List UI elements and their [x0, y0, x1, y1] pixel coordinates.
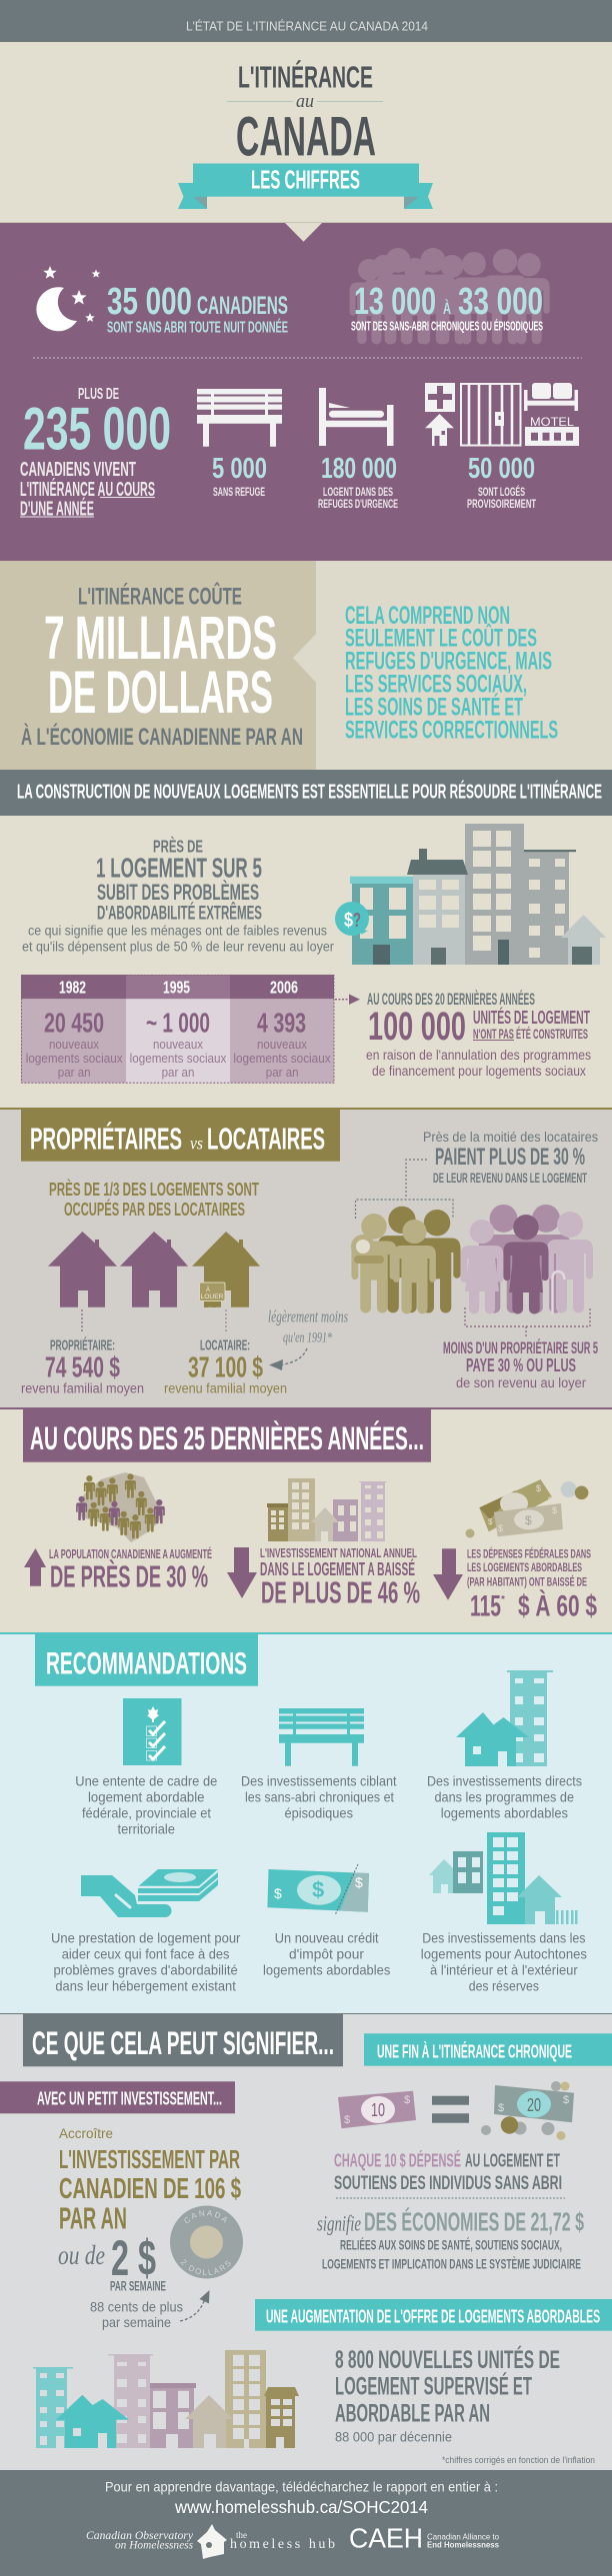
stat: 50 000: 50 000 [468, 453, 535, 485]
banner: end of chronic homelessness [364, 2033, 612, 2066]
icon: toonie coin: 2 DOLLARS [180, 2259, 231, 2275]
stat: 50 000: SONT LOGÉS [478, 484, 525, 499]
text: every 10 dollars: CHAQUE 10 $ DÉPENSÉ [334, 2149, 461, 2170]
title: canada: CANADA [236, 105, 376, 168]
logo: canadian observatory: on Homelessness [115, 2539, 194, 2551]
text: 88 cents [90, 2299, 183, 2330]
text: 8 800 new units [335, 2345, 560, 2445]
text: 8 800 new units: 88 000 par décennie [335, 2429, 452, 2445]
text: direct investments [427, 1773, 582, 1821]
icon: money: $ [488, 1517, 493, 1526]
text: 88 cents: par semaine [102, 2314, 171, 2330]
text: targeted investments: les sans-abri chroniques et [245, 1789, 394, 1805]
icon: rental house with sign: À [206, 1287, 210, 1293]
title panel [0, 42, 612, 223]
heading [23, 2013, 343, 2066]
icon: equals [432, 2096, 469, 2123]
text: indigenous housing: logements pour Autochtones [421, 1945, 587, 1961]
illustration: buildings [335, 824, 606, 965]
arrow: down [227, 1547, 257, 1598]
text: indigenous housing: à l'intérieur et à l'extérieur [430, 1961, 578, 1977]
icon: money: $ [525, 1513, 532, 1527]
stat: 13 000 à 33 000: À [443, 299, 451, 318]
top header bar [0, 0, 612, 42]
icon: jail [461, 384, 520, 446]
stat: national investment: DANS LE LOGEMENT A BAISSÉ [260, 1558, 415, 1579]
column: 2006: logements sociaux [233, 1052, 331, 1066]
text: housing benefit: dans leur hébergement existant [55, 1977, 236, 1993]
stat: 35 000 [107, 281, 288, 337]
logo: homeless hub [197, 2524, 335, 2559]
arrow: dashed note arrow [269, 1348, 307, 1370]
icon: renter family [351, 1207, 460, 1313]
stat: national investment [260, 1546, 420, 1610]
text: targeted investments: épisodiques [284, 1805, 353, 1821]
column: 1982: par an [58, 1066, 91, 1080]
renter income: 37 100 $ [188, 1352, 263, 1384]
column: 1995: par an [162, 1066, 194, 1080]
illustration: city block [33, 2350, 299, 2448]
stat: 5 000 sans refuge: 5 000 [212, 453, 267, 485]
heading [23, 1409, 431, 1462]
stat: 235 000: L'ITINÉRANCE AU COURS [20, 478, 155, 501]
text: housing benefit: aider ceux qui font face à des [62, 1945, 230, 1961]
one third text: OCCUPÉS PAR DES LOCATAIRES [64, 1199, 245, 1220]
heading: LOCATAIRES [207, 1121, 325, 1156]
one third text [49, 1179, 259, 1220]
stat: 13 000 à 33 000: 33 000 [458, 281, 543, 323]
column: 1982: 1982 [59, 977, 86, 997]
logo: caeh: End Homelessness [427, 2540, 500, 2549]
stat: population: LA POPULATION CANADIENNE A AUGMENTÉ [49, 1546, 212, 1561]
text: direct investments: logements abordables [441, 1805, 568, 1821]
column: 2006: 4 393 [257, 1008, 306, 1039]
icon: framework document [123, 1698, 182, 1765]
one third text: PRÈS DE 1/3 DES LOGEMENTS SONT [49, 1179, 259, 1200]
1 in 5 text [22, 836, 334, 955]
icon: speech bubble [335, 902, 369, 936]
icon: money: $ [536, 1483, 541, 1493]
text: learn more: Pour en apprendre davantage, télédécharchez le rapport en entier à : [105, 2478, 498, 2494]
text: investment per canadian: 2 $ [111, 2230, 156, 2286]
stat: 180 000: LOGENT DANS DES [323, 485, 393, 499]
renters text: Près de la moitié des locataires [423, 1130, 598, 1145]
column: 1982: logements sociaux [26, 1052, 123, 1066]
icon: motel bed [524, 383, 578, 411]
heading: vs [190, 1133, 203, 1153]
text: targeted investments: Des investissements ciblant [241, 1773, 397, 1789]
owner income: revenu familial moyen [21, 1380, 144, 1395]
stat: 35 000: 35 000 [107, 281, 192, 323]
stat: 180 000: REFUGES D'URGENCE [318, 497, 398, 511]
title: au with rules: au [296, 91, 314, 112]
column: 1995: 1995 [163, 977, 190, 997]
1 in 5 text: SUBIT DES PROBLÈMES [97, 880, 259, 905]
icon: crowd [350, 248, 550, 344]
footnote: *chiffres corrigés en fonction de l'inflation [442, 2455, 595, 2466]
note: slightly less than 1991: qu'en 1991* [283, 1330, 332, 1346]
icon: 10 dollar bill [338, 2091, 416, 2128]
icon: bed [319, 388, 394, 446]
stat: 180 000: 180 000 [321, 453, 397, 485]
heading [21, 1110, 340, 1162]
100 000 units text [366, 990, 591, 1079]
column: 1982: nouveaux [49, 1038, 100, 1052]
icon: money: $ [548, 1495, 553, 1505]
text: direct investments: dans les programmes de [434, 1789, 574, 1805]
stat: 35 000: CANADIENS [197, 292, 288, 320]
renter income [164, 1337, 287, 1395]
ribbon: les chiffres [178, 164, 433, 209]
stat: 5 000 sans refuge: SANS REFUGE [213, 485, 265, 499]
stat: 13 000 à 33 000: 13 000 [354, 281, 436, 323]
text: savings: signifie [317, 2211, 361, 2236]
stat: 235 000: CANADIENS VIVENT [20, 459, 136, 481]
stat: population [49, 1546, 212, 1594]
ribbon: les chiffres: LES CHIFFRES [251, 165, 360, 195]
text: 8 800 new units: ABORDABLE PAR AN [335, 2400, 490, 2428]
arrow: table to units [335, 994, 360, 1005]
stat: national investment: L'INVESTISSEMENT NATIONAL ANNUEL [260, 1546, 417, 1560]
column: 1982 [26, 977, 123, 1080]
renter income: revenu familial moyen [164, 1380, 287, 1395]
stat: federal spending: 115 [470, 1590, 501, 1623]
heading: RECOMMANDATIONS [46, 1644, 247, 1680]
icon: bill with tax credit cut: $ [312, 1877, 324, 1902]
icon: house [425, 414, 454, 446]
text: tax credit: Un nouveau crédit [275, 1929, 379, 1945]
logo: caeh: Canadian Alliance to [427, 2533, 500, 2542]
icon: buildings [267, 1478, 387, 1541]
icon: moon and stars [36, 266, 100, 331]
text: framework [75, 1773, 217, 1837]
text: investment per canadian: L'INVESTISSEMENT PAR [59, 2146, 240, 2174]
renter income: LOCATAIRE: [200, 1337, 250, 1354]
icon: 10 dollar bill: 10 [371, 2100, 385, 2120]
1 in 5 text: et qu'ils dépensent plus de 50 % de leur revenu au loyer [22, 940, 334, 955]
cost headline: DE DOLLARS [48, 659, 273, 726]
stat: population: DE PRÈS DE 30 % [50, 1559, 208, 1594]
column: 2006: 2006 [270, 977, 298, 997]
column: 1995: logements sociaux [130, 1052, 227, 1066]
logo: canadian observatory [86, 2530, 194, 2551]
cost headline: L'ITINÉRANCE COÛTE [78, 583, 242, 611]
banner: increased supply [255, 2299, 612, 2331]
text: tax credit: d'impôt pour [289, 1945, 364, 1961]
column: 2006: nouveaux [257, 1038, 308, 1052]
stat: 13 000 à 33 000 [351, 281, 543, 334]
panel: owners vs renters [0, 1108, 612, 1407]
icon: money: $ [498, 1523, 503, 1533]
stat: 35 000: SONT SANS ABRI TOUTE NUIT DONNÉE [107, 320, 288, 337]
logo: caeh: CAEH [349, 2522, 423, 2553]
owner income: PROPRIÉTAIRE: [50, 1337, 115, 1354]
100 000 units text: de financement pour logements sociaux [372, 1064, 586, 1079]
notch [285, 223, 322, 242]
text: tax credit [263, 1929, 390, 1977]
text: framework: fédérale, provinciale et [82, 1805, 211, 1821]
icon: hospital [425, 383, 455, 412]
arrow: down [433, 1548, 463, 1600]
icon: 10 dollar bill: $ [404, 2094, 410, 2106]
heading: PROPRIÉTAIRES [30, 1121, 182, 1156]
icon: houses and tower [456, 1670, 553, 1766]
owner income [21, 1337, 144, 1395]
column: 1982: 20 450 [44, 1008, 104, 1039]
text: indigenous housing: des réserves [469, 1977, 539, 1993]
icon: hand with money [81, 1869, 218, 1917]
text: framework: Une entente de cadre de [75, 1773, 217, 1789]
logo: homeless hub: the [236, 2530, 247, 2540]
panel: past 25 years [0, 1407, 612, 1632]
text: investment per canadian: ou de [58, 2240, 105, 2270]
owners text [443, 1338, 598, 1390]
banner: small investment [0, 2081, 235, 2113]
note: slightly less than 1991 [268, 1307, 348, 1346]
stat: federal spending [467, 1545, 597, 1623]
text: investment per canadian: PAR SEMAINE [110, 2279, 166, 2294]
icon: motel [525, 415, 579, 446]
stat: federal spending: * [501, 1594, 505, 1605]
cost headline [21, 583, 303, 751]
text: framework: logement abordable [88, 1789, 205, 1805]
text: 88 cents: 88 cents de plus [90, 2299, 183, 2315]
text: direct investments: Des investissements directs [427, 1773, 582, 1789]
1 in 5 text: PRÈS DE [153, 836, 203, 857]
text: investment per canadian [58, 2125, 241, 2294]
icon: rental house with sign [192, 1232, 260, 1307]
icon: toonie coin: CANADA [184, 2210, 227, 2223]
heading: CE QUE CELA PEUT SIGNIFIER... [32, 2025, 334, 2061]
icon: 20 dollar bill and coins: $ [563, 2094, 569, 2106]
icon: owner houses [48, 1232, 188, 1307]
text: housing benefit [51, 1929, 241, 1993]
icon: 10 dollar bill: $ [344, 2114, 350, 2126]
arrow: dashed to coin [180, 2290, 210, 2321]
stat: 235 000: D'UNE ANNÉE [20, 498, 94, 521]
icon: bill with tax credit cut: $ [274, 1885, 282, 1901]
report name: L'ÉTAT DE L'ITINÉRANCE AU CANADA 2014 [186, 19, 428, 34]
text: framework: territoriale [118, 1821, 175, 1837]
icon: 20 dollar bill and coins: $ [498, 2102, 504, 2114]
panel: what it could mean [0, 2013, 612, 2470]
text: indigenous housing: Des investissements dans les [422, 1929, 586, 1945]
table: new social housing per year [21, 975, 334, 1083]
panel: cost [0, 561, 612, 770]
stat: 180 000 [318, 453, 398, 511]
cost headline: À L'ÉCONOMIE CANADIENNE PAR AN [21, 723, 303, 751]
column: 2006 [233, 977, 331, 1080]
panel: recommendations [0, 1632, 612, 2013]
icon: indigenous housing buildings [429, 1832, 578, 1924]
stat: 50 000: PROVISOIREMENT [467, 497, 536, 511]
text: targeted investments [241, 1773, 397, 1821]
icon: money [466, 1479, 588, 1537]
icon: speech bubble: ? [353, 910, 361, 932]
icon: bench [197, 389, 282, 447]
note: slightly less than 1991: légèrement moins [268, 1307, 348, 1326]
1 in 5 text: ce qui signifie que les ménages ont de faibles revenus [28, 924, 327, 939]
icon: owner group [461, 1205, 593, 1314]
text: tax credit: logements abordables [263, 1961, 390, 1977]
panel: affordability [0, 816, 612, 1108]
column: 1995: nouveaux [153, 1038, 204, 1052]
stat: national investment: DE PLUS DE 46 % [261, 1575, 420, 1610]
stat: 235 000 [20, 386, 171, 521]
arrow: up [24, 1548, 46, 1586]
icon: bench [279, 1708, 364, 1766]
icon: money: $ [552, 1505, 557, 1515]
link text: www.homelesshub.ca/SOHC2014 [174, 2497, 428, 2517]
1 in 5 text: 1 LOGEMENT SUR 5 [96, 852, 262, 883]
footer [0, 2470, 612, 2576]
column: 1995: ~ 1 000 [146, 1008, 210, 1039]
1 in 5 text: D'ABORDABILITÉ EXTRÊMES [97, 902, 262, 924]
text: every 10 dollars [334, 2149, 562, 2194]
icon: 20 dollar bill and coins [481, 2081, 574, 2140]
text: housing benefit: Une prestation de logement pour [51, 1929, 241, 1945]
text: investment per canadian: PAR AN [59, 2200, 127, 2235]
icon: 20 dollar bill and coins: 20 [527, 2095, 541, 2115]
icon: speech bubble: $ [344, 910, 353, 932]
text: investment per canadian: CANADIEN DE 106 $ [59, 2173, 241, 2205]
stat: 50 000 [467, 453, 536, 511]
stat: 5 000 sans refuge [212, 453, 267, 499]
renters text [423, 1130, 598, 1186]
icon: bill with tax credit cut: $ [355, 1874, 363, 1890]
panel: key numbers [0, 223, 612, 561]
banner: small investment: AVEC UN PETIT INVESTISSEMENT... [37, 2089, 222, 2109]
stat: 235 000: 235 000 [23, 395, 171, 462]
stat: 235 000: PLUS DE [78, 386, 119, 403]
heading [35, 1634, 258, 1686]
icon: motel: MOTEL [530, 415, 574, 429]
icon: rental house with sign: LOUER [200, 1293, 224, 1300]
logo: caeh [349, 2522, 500, 2553]
text: housing benefit: problèmes graves d'abordabilité [54, 1961, 238, 1977]
icon: toonie coin [170, 2205, 243, 2279]
banner: construction [0, 770, 612, 816]
text: savings [317, 2207, 584, 2272]
column: 1995 [130, 977, 227, 1080]
owner income: 74 540 $ [45, 1352, 120, 1384]
cost explanation [345, 602, 558, 744]
100 000 units text: en raison de l'annulation des programmes [366, 1048, 591, 1063]
logo: homeless hub: homeless hub [230, 2537, 335, 2552]
icon: bill with tax credit cut [267, 1864, 369, 1915]
text: indigenous housing [421, 1929, 587, 1993]
100 000 units text: 100 000 [368, 1005, 466, 1049]
owners text: de son revenu au loyer [456, 1375, 586, 1390]
title: l'itinérance: L'ITINÉRANCE [238, 60, 373, 95]
cost headline: 7 MILLIARDS [44, 604, 277, 673]
column: 2006: par an [266, 1066, 299, 1080]
text: investment per canadian: Accroître [59, 2125, 113, 2141]
logo: canadian observatory: Canadian Observatory [86, 2530, 194, 2542]
icon: canada map with people [76, 1472, 165, 1542]
